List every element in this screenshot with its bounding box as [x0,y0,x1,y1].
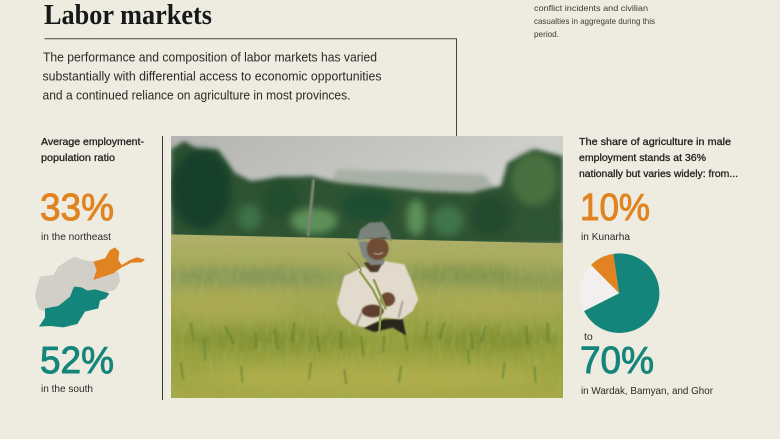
right column: agriculture share [579,136,738,397]
wheat field [171,234,563,398]
orange slice [591,254,619,293]
label: in the northeast: in the northeast [41,231,111,243]
photo: farmer in a wheat field [168,136,571,398]
intro paragraph: and a continued reliance on agriculture in most provinces. [42,88,350,102]
stat: 10 percent: 10% [580,187,650,229]
trousers [363,319,406,335]
farmer [337,222,418,335]
teal slice [584,253,659,333]
stat: 33 percent: 33% [40,187,114,229]
label: to: to [584,331,593,343]
sidebar note, top right [534,3,655,39]
sidebar note, top right: conflict incidents and civilian [534,3,648,13]
light slice [580,265,619,311]
right column heading: The share of agriculture in male [579,136,731,148]
label: provinces: in Wardak, Bamyan, and Ghor [581,385,713,397]
sidebar note, top right: period. [534,29,559,39]
heading rule [44,39,456,136]
intro paragraph [42,50,382,102]
right column heading: employment stands at 36% [579,152,706,164]
utility pole [308,179,314,236]
tree line [171,141,563,244]
left column heading: Average employment- [41,136,144,148]
map of Afghanistan [35,247,145,327]
right column heading: nationally but varies widely: from... [579,168,738,180]
pie chart [580,253,659,333]
face [367,237,389,260]
head wrap [357,222,392,241]
column divider [162,136,164,400]
neck and scarf [364,260,384,272]
wheat bundle [359,271,386,333]
title: Labor markets [44,0,212,31]
right column heading [579,136,738,180]
sidebar note, top right: casualties in aggregate during this [534,16,655,26]
wheat stalks [181,321,548,384]
stat: 52 percent: 52% [40,340,114,382]
left column heading [41,136,144,164]
stat: 70 percent: 70% [580,340,654,382]
intro paragraph: The performance and composition of labor markets has varied [43,50,377,64]
label: in Kunarha: in Kunarha [581,231,630,243]
label: in the south: in the south [41,383,93,395]
intro paragraph: substantially with differential access to economic opportunities [42,68,382,84]
left column: employment-population ratio [35,136,145,395]
hands [362,305,384,317]
white shirt [337,261,418,328]
left column heading: population ratio [41,152,115,164]
